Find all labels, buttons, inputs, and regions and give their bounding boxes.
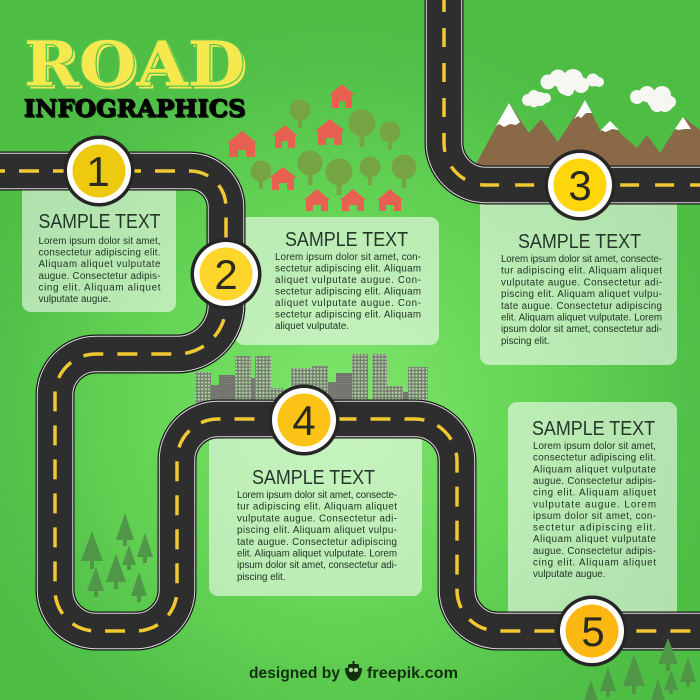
marker 2: 2 xyxy=(214,251,238,298)
footer credit: freepik.com xyxy=(367,665,458,682)
panel 4: piscing elit. xyxy=(237,572,285,583)
panel 5: consectetur adipiscing elit. xyxy=(533,453,656,464)
marker 5 xyxy=(556,596,628,666)
panel 3: tate augue. Consectetur adipiscing xyxy=(501,301,662,312)
marker 3 xyxy=(544,150,616,220)
panel 3: SAMPLE TEXT xyxy=(518,231,641,253)
marker 4 xyxy=(268,384,340,456)
main road xyxy=(0,171,700,631)
marker 4: 4 xyxy=(292,397,316,444)
panel 5: cing elit. Aliquam aliquet xyxy=(533,488,656,499)
panel 4: SAMPLE TEXT xyxy=(252,467,375,489)
panel 3: tur adipiscing elit. Aliquam aliquet xyxy=(501,266,662,277)
panel 2: aliquet vulputate augue. Con- xyxy=(275,298,421,309)
panel 5: Lorem ipsum dolor sit amet, xyxy=(533,441,656,452)
panel 5: vulputate augue. xyxy=(533,569,605,580)
panel 4: ipsum dolor sit amet, consectetur adi- xyxy=(237,560,397,571)
marker 3: 3 xyxy=(568,162,592,209)
panel 2: sectetur adipiscing elit. Aliquam xyxy=(275,264,421,274)
panel 1: cing elit. Aliquam aliquet xyxy=(38,282,161,293)
panel 1: augue. Consectetur adipis- xyxy=(38,271,160,282)
panel 5: SAMPLE TEXT xyxy=(532,418,655,440)
panel 1: consectetur adipiscing elit. xyxy=(38,248,160,259)
panel 4: Lorem ipsum dolor sit amet, consecte- xyxy=(237,490,397,501)
panel 1: Lorem ipsum dolor sit amet, xyxy=(38,236,160,247)
marker 1 xyxy=(64,136,134,206)
panel 5: augue. Consectetur adipis- xyxy=(533,476,656,487)
forest right xyxy=(582,638,696,700)
panel 2: aliquet vulputate augue. Con- xyxy=(275,275,421,286)
title: ROAD xyxy=(27,30,248,104)
panel 2: Lorem ipsum dolor sit amet, con- xyxy=(275,252,421,263)
title: INFOGRAPHICS xyxy=(24,94,245,122)
footer credit: designed by xyxy=(249,665,340,682)
panel 4: tate augue. Consectetur adipiscing xyxy=(237,537,397,548)
title: ROAD xyxy=(24,28,245,100)
mountains xyxy=(475,100,700,170)
panel 3: piscing elit. xyxy=(501,336,549,347)
panel 1: SAMPLE TEXT xyxy=(38,211,160,233)
panel 2 xyxy=(235,217,439,345)
second road xyxy=(444,0,700,185)
marker 2 xyxy=(190,238,262,310)
forest left xyxy=(81,513,153,602)
panel 1: vulputate augue. xyxy=(38,294,111,305)
panel 5: vulputate augue. Lorem xyxy=(533,499,656,510)
panel 4: elit. Aliquam aliquet vulputate. Lorem xyxy=(237,548,397,560)
panel 2: sectetur adipiscing elit. Aliquam xyxy=(275,310,421,320)
panel 4 xyxy=(209,425,422,596)
panel 3: piscing elit. Aliquam aliquet vulpu- xyxy=(501,289,662,300)
panel 1: Aliquam aliquet vulputate xyxy=(38,259,161,270)
panel 5 xyxy=(508,402,677,627)
title: INFOGRAPHICS xyxy=(24,96,246,124)
panel 2: aliquet vulputate. xyxy=(275,321,349,332)
panel 2: SAMPLE TEXT xyxy=(285,229,408,251)
panel 5: Aliquam aliquet vulputate xyxy=(533,534,657,545)
panel 5: sectetur adipiscing elit. xyxy=(533,523,656,534)
panel 3: Lorem ipsum dolor sit amet, consecte- xyxy=(501,254,662,265)
village houses xyxy=(227,84,403,211)
footer credit xyxy=(249,661,458,682)
panel 5: Aliquam aliquet vulputate xyxy=(533,464,657,475)
panel 2: sectetur adipiscing elit. Aliquam xyxy=(275,286,421,298)
panel 4: vulputate augue. Consectetur adi- xyxy=(237,513,397,524)
marker 5: 5 xyxy=(581,608,605,655)
panel 4: tur adipiscing elit. Aliquam aliquet xyxy=(237,502,397,513)
panel 5: cing elit. Aliquam aliquet xyxy=(533,558,656,568)
panel 4: piscing elit. Aliquam aliquet vulpu- xyxy=(237,525,397,536)
panel 5: augue. Consectetur adipis- xyxy=(533,546,656,557)
clouds xyxy=(522,69,676,112)
panel 3 xyxy=(480,195,677,365)
icon: freepik logo xyxy=(345,661,362,681)
panel 3: elit. Aliquam aliquet vulputate. Lorem xyxy=(501,312,662,324)
marker 1: 1 xyxy=(86,148,110,195)
panel 3: ipsum dolor sit amet, consectetur adi- xyxy=(501,324,662,335)
city skyline xyxy=(195,354,428,407)
panel 1 xyxy=(22,180,176,312)
panel 3: vulputate augue. Consectetur adi- xyxy=(501,277,662,288)
village trees xyxy=(250,100,416,195)
panel 5: ipsum dolor sit amet, con- xyxy=(533,511,656,522)
